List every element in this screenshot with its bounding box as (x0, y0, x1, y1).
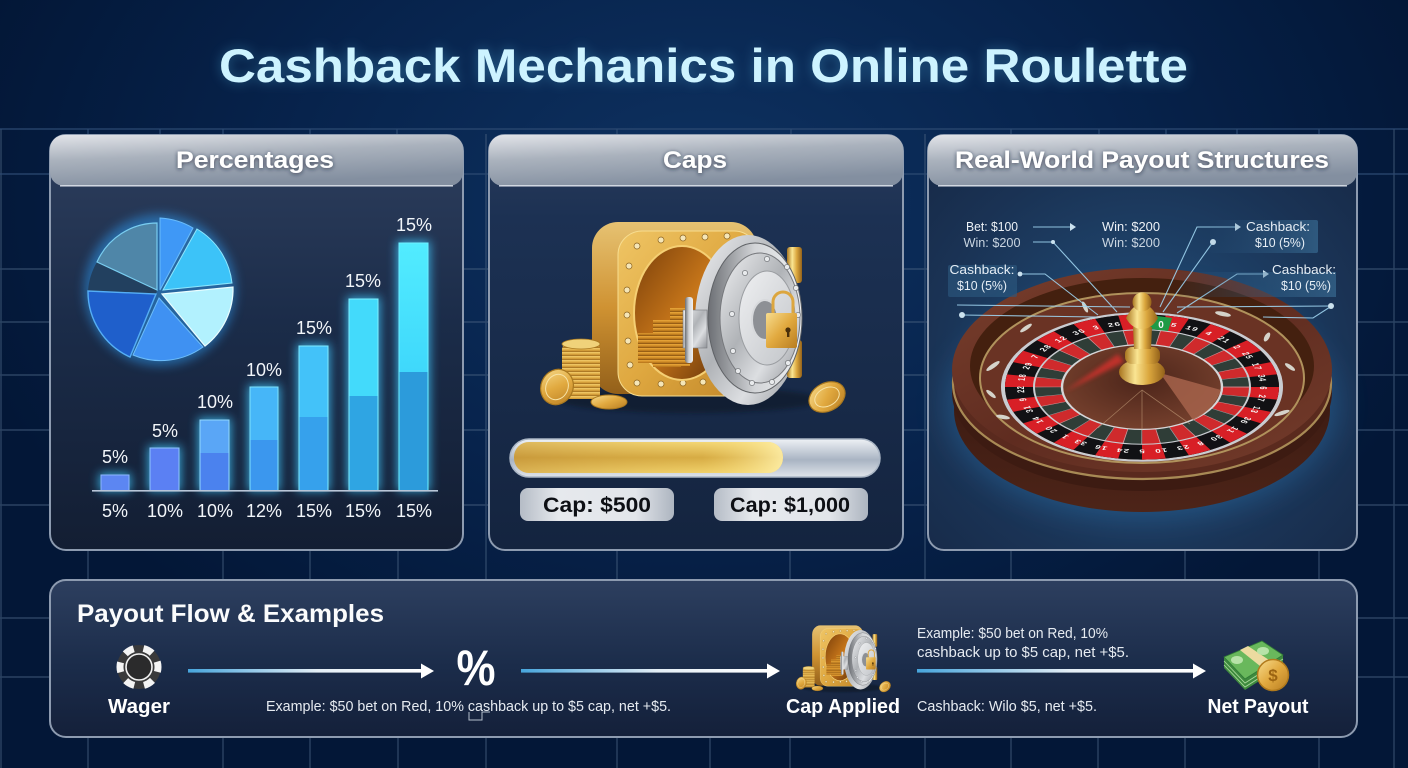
bar axis labels: 10% (147, 501, 183, 521)
roulette wheel (937, 268, 1347, 528)
bar axis labels: 10% (197, 501, 233, 521)
arrow: cap to net payout (917, 664, 1206, 678)
icon: cash and coin: $ (1268, 666, 1278, 685)
example text: cap: cashback up to $5 cap, net +$5. (917, 645, 1129, 661)
icon: gold vault (535, 222, 850, 418)
payout label: bet and win: Bet: $100 (966, 220, 1018, 234)
callout: cashback top right: $10 (5%) (1255, 236, 1305, 250)
panel: caps (489, 135, 903, 550)
heading: percentages (50, 135, 463, 187)
cashback text: Cashback: Wilo $5, net +$5. (917, 699, 1097, 715)
bar value labels: 15% (396, 215, 432, 235)
payout label: win: Win: $200 (1102, 220, 1160, 234)
bar value labels: 5% (152, 421, 178, 441)
example text: Example: $50 bet on Red, 10% cashback up to $5 cap, net +$5. (266, 699, 671, 715)
bar chart (92, 241, 438, 492)
callout: cashback right: $10 (5%) (1281, 279, 1331, 293)
panel: real-world payout structures (927, 134, 1358, 551)
panel: payout flow and examples (50, 580, 1357, 737)
bar value labels: 15% (345, 271, 381, 291)
title: Cashback Mechanics in Online Roulette (219, 39, 1188, 92)
payout label: win (1102, 220, 1160, 250)
bar axis labels: 5% (102, 501, 128, 521)
roulette wheel: 32 15 19 4 21 2 25 17 34 6 27 13 36 11 30 8 23 10 5 24 16 33 1 20 14 31 9 22 18 29 7 28 12 35 3 26 (1017, 322, 1267, 454)
bar axis labels (102, 501, 432, 521)
arrow: wager to percent (188, 664, 434, 678)
heading: real-world payout structures (928, 135, 1357, 187)
example text: cap: Example: $50 bet on Red, 10% (917, 626, 1108, 642)
example text: cap (917, 626, 1129, 661)
panel: percentages (50, 135, 463, 550)
icon: percent: % (456, 640, 496, 696)
progress bar (510, 439, 880, 477)
callout: cashback right: Cashback: (1272, 263, 1336, 277)
icon: small vault (794, 625, 892, 694)
heading: caps (489, 135, 903, 187)
cap label: $500: Cap: $500 (543, 494, 651, 517)
callout: cashback left (948, 263, 1017, 297)
bar axis labels: 15% (396, 501, 432, 521)
bar value labels: 10% (246, 360, 282, 380)
callout: cashback top right: Cashback: (1246, 220, 1310, 234)
bar axis labels: 15% (345, 501, 381, 521)
callout: cashback top right (1210, 220, 1318, 253)
bar value labels: 15% (296, 318, 332, 338)
icon: small outline glyph (469, 712, 490, 720)
bar value labels: 5% (102, 447, 128, 467)
heading: payout flow and examples: Payout Flow & Examples (77, 600, 384, 628)
roulette centre turret (1119, 292, 1165, 385)
cap label: $1,000 (714, 488, 868, 521)
arrow: percent to cap (521, 664, 780, 678)
callout: cashback left: $10 (5%) (957, 279, 1007, 293)
heading: percentages: Percentages (176, 147, 334, 174)
label: wager: Wager (108, 696, 170, 718)
roulette wheel: 0 (1158, 320, 1164, 331)
bar axis labels: 15% (296, 501, 332, 521)
payout label: bet and win: Win: $200 (964, 236, 1021, 250)
icon: cash and coin (1224, 641, 1288, 690)
bar value labels (102, 215, 432, 467)
heading: caps: Caps (663, 147, 727, 174)
callout: cashback right (1180, 263, 1336, 297)
icon: poker chip (117, 645, 161, 689)
label: cap applied: Cap Applied (786, 696, 900, 718)
bar axis labels: 12% (246, 501, 282, 521)
cap label: $1,000: Cap: $1,000 (730, 494, 850, 517)
cap label: $500 (520, 488, 674, 521)
payout label: bet and win (964, 220, 1021, 250)
label: net payout: Net Payout (1208, 696, 1309, 718)
title: Cashback Mechanics in Online Roulette (219, 39, 1188, 92)
heading: real-world payout structures: Real-World Payout Structures (955, 147, 1329, 174)
bar value labels: 10% (197, 392, 233, 412)
callout: cashback left: Cashback: (950, 263, 1014, 277)
callout lines and arrows (957, 223, 1334, 318)
pie chart (84, 214, 236, 366)
payout label: win: Win: $200 (1102, 236, 1160, 250)
